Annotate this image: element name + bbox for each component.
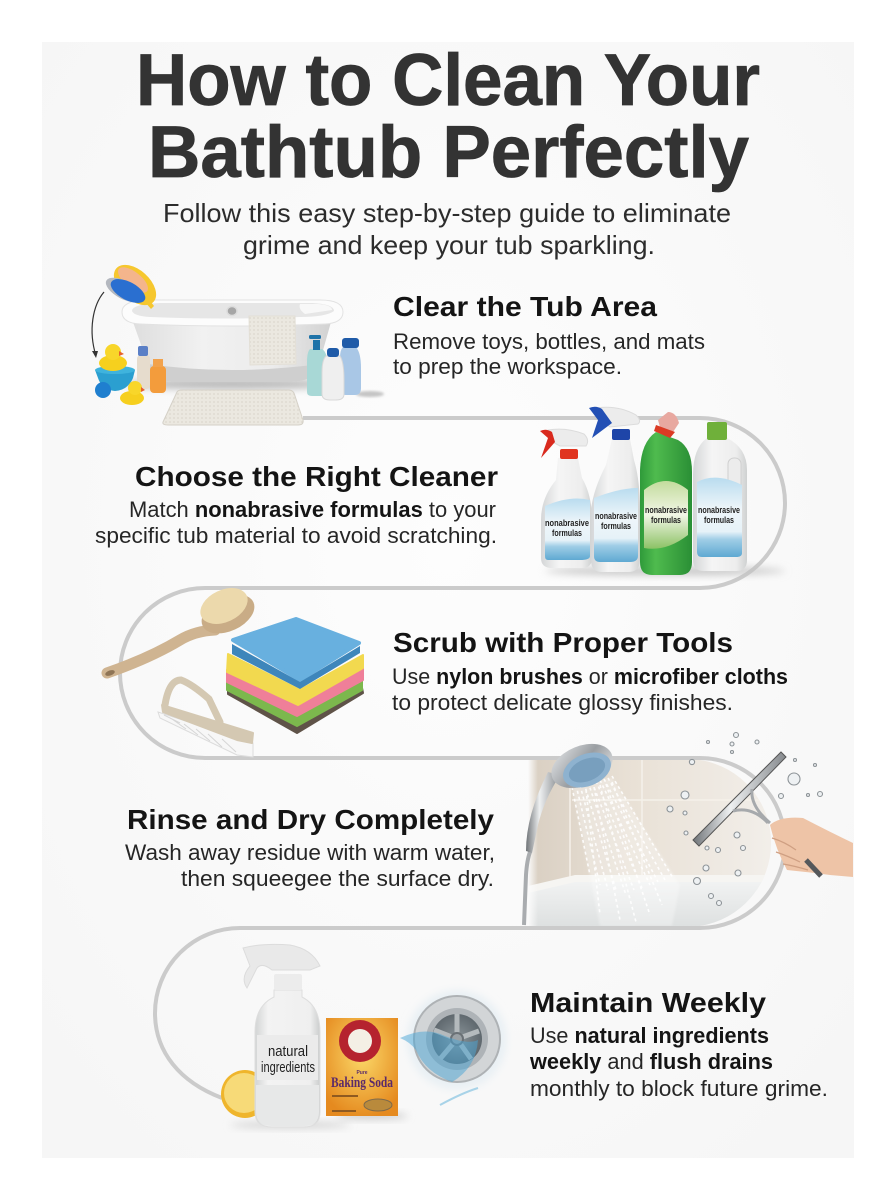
step 1: clear the tub area bbox=[92, 257, 705, 425]
description: Wash away residue with warm water, bbox=[125, 840, 495, 865]
illustration: cleaner bottles bbox=[540, 407, 785, 575]
long-handled brush bbox=[104, 581, 261, 677]
subtitle: Follow this easy step-by-step guide to eliminate bbox=[163, 198, 731, 228]
title bbox=[136, 40, 760, 193]
green bottle: formulas bbox=[651, 515, 681, 525]
description: Use natural ingredients bbox=[530, 1023, 769, 1048]
title: How to Clean Your bbox=[136, 40, 760, 121]
baking soda box: Baking Soda bbox=[331, 1075, 393, 1091]
illustration: natural ingredients, baking soda and drain bbox=[221, 944, 507, 1128]
spray bottle red: nonabrasive bbox=[545, 518, 589, 528]
description: Match nonabrasive formulas to your bbox=[129, 497, 496, 522]
jug bottle bbox=[693, 422, 747, 571]
description bbox=[529, 1023, 828, 1101]
description: then squeegee the surface dry. bbox=[181, 866, 494, 891]
illustration: shower rinsing and squeegee bbox=[524, 732, 853, 930]
heading: Rinse and Dry Completely bbox=[127, 804, 494, 835]
drain with water bbox=[400, 990, 507, 1105]
step 3: scrub with proper tools bbox=[104, 581, 788, 757]
green bottle: nonabrasive bbox=[645, 505, 687, 515]
description: Remove toys, bottles, and mats bbox=[393, 329, 705, 354]
glass spray bottle bbox=[243, 944, 320, 1127]
bottle label: ingredients bbox=[261, 1059, 315, 1076]
spray bottle blue bbox=[589, 407, 640, 572]
scrub brush bbox=[158, 680, 253, 757]
illustration: bathtub with toys and bottles bbox=[92, 257, 384, 425]
heading: Choose the Right Cleaner bbox=[135, 461, 498, 492]
description: monthly to block future grime. bbox=[530, 1076, 828, 1101]
description: weekly and flush drains bbox=[529, 1049, 773, 1074]
description: to protect delicate glossy finishes. bbox=[392, 690, 733, 715]
step 2: choose the right cleaner bbox=[95, 407, 785, 575]
title: Bathtub Perfectly bbox=[148, 112, 749, 193]
step 4: rinse and dry completely bbox=[125, 732, 853, 930]
spray bottle red: formulas bbox=[552, 528, 582, 538]
description bbox=[392, 664, 788, 715]
jug bottle: nonabrasive bbox=[698, 505, 740, 515]
heading: Clear the Tub Area bbox=[393, 291, 657, 322]
cloth stack bbox=[227, 619, 363, 733]
description bbox=[95, 497, 497, 548]
step 5: maintain weekly bbox=[221, 944, 828, 1128]
shower head bbox=[526, 735, 619, 853]
lemon bbox=[221, 1070, 269, 1118]
connector path linking steps bbox=[120, 418, 785, 1098]
green bottle bbox=[640, 412, 692, 575]
description bbox=[125, 840, 495, 891]
hose bbox=[524, 852, 530, 925]
heading: Maintain Weekly bbox=[530, 987, 766, 1018]
spray bottle red bbox=[540, 429, 592, 568]
description: to prep the workspace. bbox=[393, 354, 622, 379]
illustration: brushes and microfiber cloths bbox=[104, 581, 363, 757]
description bbox=[393, 329, 705, 379]
bottle label: natural bbox=[268, 1043, 308, 1060]
description: Use nylon brushes or microfiber cloths bbox=[392, 664, 788, 689]
tub wall scene bbox=[528, 760, 790, 930]
description: specific tub material to avoid scratching. bbox=[95, 523, 497, 548]
water drops bbox=[667, 732, 822, 906]
jug bottle: formulas bbox=[704, 515, 734, 525]
spray bottle blue: nonabrasive bbox=[595, 511, 637, 521]
subtitle: grime and keep your tub sparkling. bbox=[243, 230, 655, 260]
subtitle bbox=[163, 198, 731, 260]
spray bottle blue: formulas bbox=[601, 521, 631, 531]
baking soda box bbox=[326, 1018, 408, 1119]
bottle label bbox=[257, 1035, 318, 1080]
hand bbox=[770, 818, 853, 877]
baking soda box: Pure bbox=[356, 1070, 368, 1076]
squeegee bbox=[693, 752, 786, 846]
heading: Scrub with Proper Tools bbox=[393, 627, 733, 658]
